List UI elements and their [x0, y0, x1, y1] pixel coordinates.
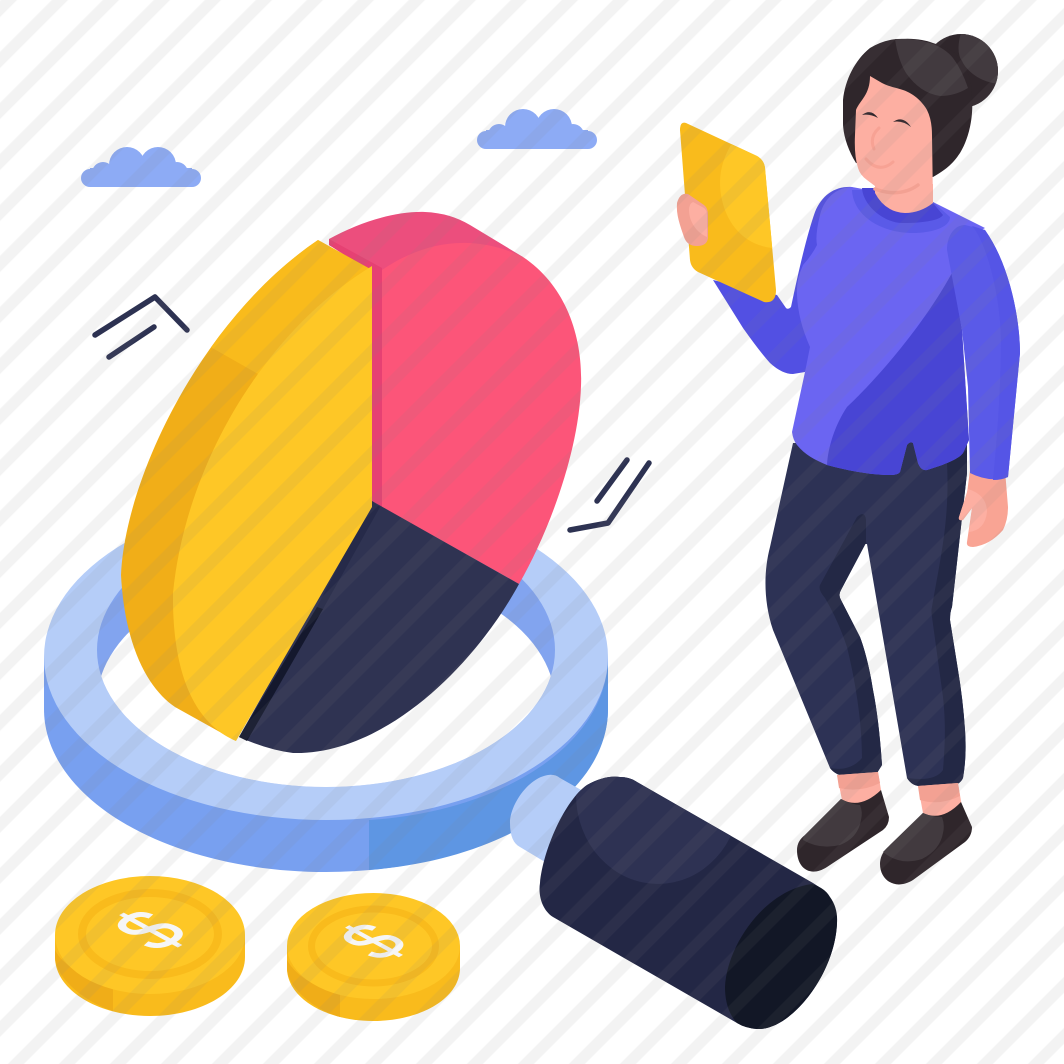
sleeve: [947, 225, 1020, 480]
pie: yellow slice: [173, 266, 372, 741]
pants shadow: [820, 514, 882, 777]
arrow: right chevron: [570, 460, 649, 530]
pie: pink slice: [382, 243, 581, 584]
magnifier ring band: [44, 657, 608, 872]
eyes: [862, 112, 911, 127]
pie: yellow side: [121, 240, 372, 741]
sweater shaded area: [827, 273, 969, 475]
hair bun: [936, 34, 998, 106]
neck crease: [875, 185, 918, 193]
dollar sign: $: [94, 899, 207, 962]
pie: pink top edge: [329, 239, 382, 280]
magnifier handle: [540, 776, 838, 1029]
nose and mouth: [866, 128, 893, 167]
hand on tablet: [677, 194, 708, 246]
pie: pink side: [329, 212, 523, 280]
forearm and shoulder shade: [713, 187, 860, 374]
collar inner: [862, 188, 943, 223]
coin: left: [55, 876, 245, 1016]
magnifier ring band shade: [369, 657, 608, 870]
ankle: left: [837, 772, 881, 805]
coin: right: [287, 893, 460, 1021]
lower hand: [959, 470, 1008, 547]
face and neck: [855, 76, 933, 213]
collar: [852, 190, 950, 233]
shoe: right: [880, 802, 972, 884]
magnifying glass: [44, 494, 837, 1029]
hair: [843, 39, 972, 177]
hair highlight: [895, 39, 968, 96]
sweater: [792, 187, 985, 475]
arrow: upper left chevron: [95, 297, 187, 357]
tablet: [680, 122, 776, 302]
cloud: right: [477, 109, 597, 149]
ankle: right: [918, 783, 962, 816]
magnifier lens opening: [101, 614, 551, 787]
shoe: left: [797, 790, 889, 872]
pants: [765, 440, 967, 786]
pie: navy slice: [239, 501, 519, 753]
pie: yellow side top: [211, 240, 368, 374]
pie chart: [121, 212, 581, 753]
magnifier ring top: [44, 494, 608, 820]
magnifier handle neck: [510, 775, 590, 865]
pie: navy edge shade: [317, 501, 380, 609]
pants side shadow: [907, 450, 967, 786]
woman: [677, 30, 1020, 884]
cloud: left: [81, 147, 201, 187]
neck front: [875, 184, 933, 213]
pie: pink inner edge: [370, 266, 382, 510]
dollar sign: $: [321, 912, 425, 970]
magnifier inner wall: [97, 513, 555, 787]
pie: navy edge: [239, 607, 323, 741]
